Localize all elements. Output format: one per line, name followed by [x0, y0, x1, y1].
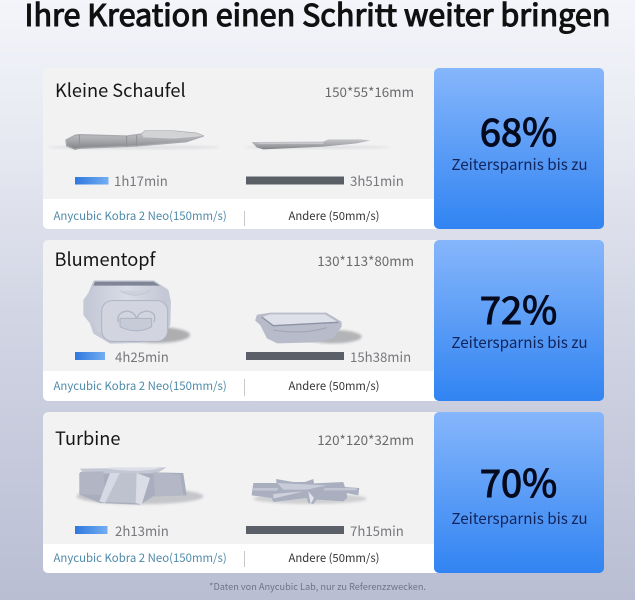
callout: 68%: Zeitersparnis bis zu [451, 153, 588, 175]
model: flower pot, Kobra [85, 282, 190, 343]
callout: 70%: Zeitersparnis bis zu [451, 507, 588, 529]
bar: Kobra time [75, 352, 105, 360]
heading: Turbine: Turbine [55, 425, 120, 451]
label: Kobra speed: Anycubic Kobra 2 Neo(150mm/s) [54, 378, 227, 394]
model: flower pot, other [256, 314, 362, 343]
time: Kobra: 1h17min [114, 171, 168, 190]
bar: other printer time [246, 176, 344, 184]
callout: 68% [434, 68, 604, 229]
panel: Kleine Schaufel [43, 68, 443, 229]
label: other speed: Andere (50mm/s) [289, 550, 379, 566]
time: other printer: 3h51min [350, 171, 404, 190]
label: other speed: Andere (50mm/s) [289, 378, 379, 394]
model: small scoop, other [243, 139, 390, 149]
dimensions: 120*120*32mm [317, 429, 414, 449]
label: Kobra speed: Anycubic Kobra 2 Neo(150mm/s) [54, 550, 227, 566]
callout: 68%: 68% [480, 102, 557, 157]
callout: 72% [434, 240, 604, 401]
heading: Blumentopf: Blumentopf [54, 246, 157, 272]
panel: Blumentopf [43, 240, 443, 401]
bar: other printer time [246, 352, 344, 360]
dimensions: 150*55*16mm [325, 81, 414, 101]
footnote: *Daten von Anycubic Lab, nur zu Referenzzwecken. [209, 579, 426, 593]
callout: 70%: 70% [480, 453, 557, 508]
model: turbine, Kobra [77, 467, 203, 505]
panel: Turbine [43, 412, 443, 573]
label: Kobra speed: Anycubic Kobra 2 Neo(150mm/s) [54, 208, 227, 224]
label: other speed: Andere (50mm/s) [289, 208, 379, 224]
time: other printer: 7h15min [350, 521, 404, 540]
callout: 70% [434, 412, 604, 573]
time: other printer: 15h38min [350, 347, 411, 366]
time: Kobra: 2h13min [115, 521, 169, 540]
dimensions: 130*113*80mm [317, 250, 414, 270]
time: Kobra: 4h25min [115, 347, 169, 366]
bar: Kobra time [75, 177, 108, 184]
bar: Kobra time [75, 526, 108, 534]
heading: Kleine Schaufel: Kleine Schaufel [55, 77, 186, 103]
callout: 72%: Zeitersparnis bis zu [451, 331, 588, 353]
callout: 72%: 72% [480, 280, 557, 335]
model: small scoop, Kobra [47, 131, 220, 149]
bar: other printer time [246, 526, 344, 534]
model: turbine, other [252, 479, 367, 504]
